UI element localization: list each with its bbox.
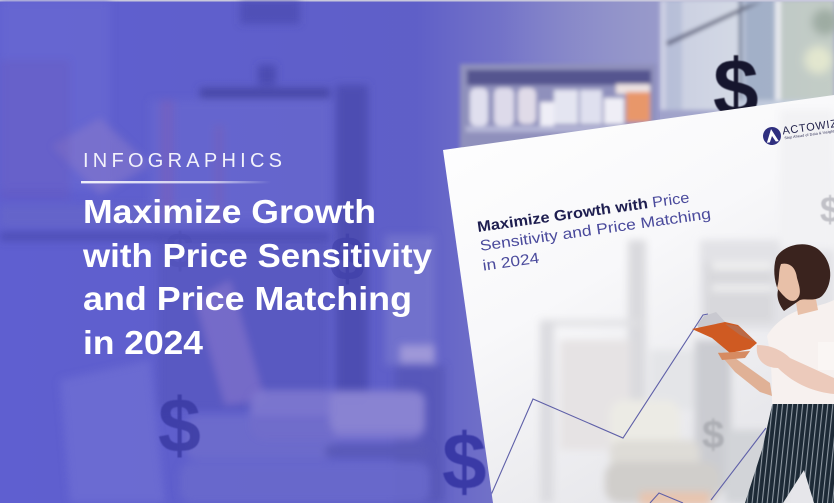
- dollar sign: dark, above brochure: $: [713, 43, 759, 134]
- title line 1: Maximize Growth with Price: [476, 189, 690, 236]
- logo: Actowiz: [762, 118, 834, 146]
- main heading: Maximize Growth: [83, 193, 376, 230]
- trousers: [745, 401, 834, 503]
- faint dollar signs on the photo: [158, 223, 486, 503]
- title line 3: in 2024: [482, 250, 540, 275]
- brochure faded photo: $: [702, 413, 724, 457]
- neck: [795, 294, 818, 315]
- photo: woman reading a package: [692, 244, 834, 503]
- main heading: in 2024: [83, 324, 204, 361]
- logo mark: [762, 126, 782, 146]
- near arm: [757, 345, 834, 394]
- faint dollar signs on the photo: $: [330, 225, 364, 294]
- faint dollar signs on the photo: $: [166, 223, 194, 279]
- main heading: [82, 193, 433, 361]
- panel: tilted brochure cover: [443, 95, 834, 503]
- brochure title: [476, 187, 715, 275]
- sleeve shade: [818, 342, 834, 370]
- main heading: with Price Sensitivity: [82, 237, 433, 274]
- shirt: [767, 300, 834, 404]
- far arm: [718, 352, 772, 396]
- kicker: INFOGRAPHICS: INFOGRAPHICS: [83, 150, 282, 172]
- brochure faded photo: [538, 194, 834, 503]
- title line 2: Sensitivity and Price Matching: [479, 206, 712, 255]
- main heading: and Price Matching: [83, 280, 412, 317]
- package: orange bag: [692, 312, 757, 360]
- hair: [774, 244, 830, 311]
- faint dollar signs on the photo: $: [158, 383, 201, 469]
- heading rule: [81, 181, 271, 183]
- chart: rising price line: [491, 314, 766, 503]
- face: [777, 264, 800, 301]
